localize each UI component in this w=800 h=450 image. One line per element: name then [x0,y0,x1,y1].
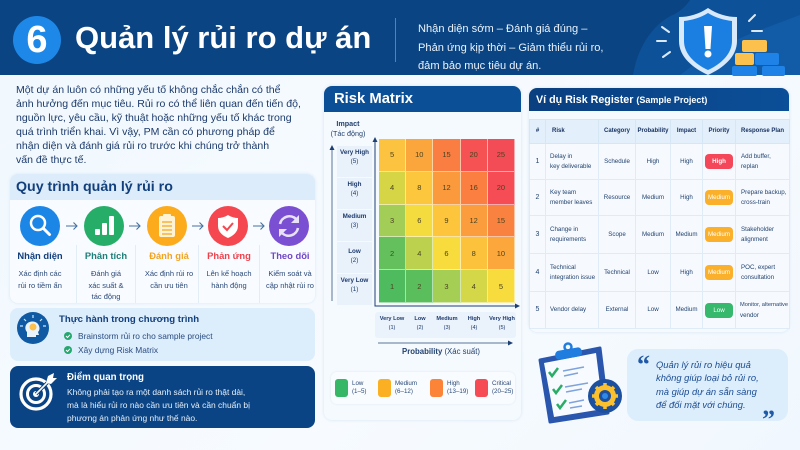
legend: (20–25) [492,388,513,395]
icon: head with light bulb [17,312,49,344]
probability column labels: (5) [499,324,505,330]
icon: monitoring cycle [269,206,309,246]
impact row labels: Medium [343,213,366,220]
impact axis label: Impact [336,119,360,128]
icon: analysis bars [84,206,124,246]
impact arrow [330,145,334,301]
risk register table: Vendor delay [550,306,586,313]
quote mark: close: ” [762,405,775,434]
quote text: không giúp loại bỏ rủi ro, [656,372,759,383]
intro text: vấn đề thực tế. [16,154,86,166]
risk register table: # [536,128,539,134]
risk heat map: 6 [444,249,449,258]
section number badge [13,16,61,64]
risk heat map: 3 [390,216,394,225]
risk register table: High [712,158,726,165]
risk register table: alignment [741,236,768,242]
risk heat map: 8 [472,249,476,258]
icon: shield with blocks [656,8,785,76]
step: analyze: Phân tích [85,250,127,261]
risk register table: High [647,158,659,165]
intro text: Một dự án luôn có những yếu tố không chắc chắn có thể [16,84,280,96]
risk register table: Medium [708,269,730,276]
step: respond: Lên kế hoạch [206,269,252,278]
arrow [253,222,265,230]
impact row labels: (1) [351,286,358,292]
legend: (13–19) [447,388,468,395]
risk register table: Impact [677,128,696,134]
legend: Medium [395,380,417,387]
quote mark: open: “ [637,350,650,379]
risk heat map: 9 [444,216,449,225]
step: monitor: cập nhật rủi ro [266,280,314,290]
practice item 1: Brainstorm rủi ro cho sample project [78,331,213,341]
practice item 2: Xây dựng Risk Matrix [78,345,158,355]
risk register table: 3 [536,231,539,238]
step: respond: Phản ứng [207,250,251,261]
probability column labels: High [468,316,480,322]
risk register table: Technical [550,264,576,271]
step: monitor: Kiểm soát và [268,269,312,278]
risk heat map: 15 [497,216,505,225]
risk register table: Schedule [604,158,630,165]
impact row labels: (4) [351,190,358,196]
step: monitor [266,250,314,290]
tagline: Phản ứng kịp thời – Giảm thiểu rủi ro, [418,42,604,54]
risk register table: Low [713,306,725,314]
risk register table: Response Plan [741,128,784,134]
step: analyze: xác suất & [88,280,124,290]
risk register table: Medium [642,194,664,201]
step: identify: rủi ro tiềm ẩn [18,280,62,290]
key point heading: Điểm quan trọng [67,372,144,383]
tagline [418,23,604,72]
icon: response shield [208,206,248,246]
risk register table: Delay in [550,153,572,160]
risk register table: 2 [536,194,539,201]
tagline: Nhận diện sớm – Đánh giá đúng – [418,23,587,35]
risk register table: Low [647,269,659,276]
risk register table: High [680,158,693,165]
step: identify [17,250,63,290]
practice heading: Thực hành trong chương trình [59,314,199,325]
arrow [192,222,204,230]
risk register table: Medium [708,231,730,238]
key point text: mà là hiểu rủi ro nào cần ưu tiên và cần chuẩn bị [67,400,250,410]
step: analyze: Đánh giá [91,269,121,278]
risk register table: Prepare backup, [741,189,786,196]
risk heat map: 12 [470,216,478,225]
icon: search [20,206,60,246]
process heading: Quy trình quản lý rủi ro [16,179,173,195]
risk register table: Resource [604,194,630,201]
risk register table: 1 [536,158,539,165]
risk heat map: 15 [442,150,451,159]
risk heat map: 6 [417,216,421,225]
panel: risk matrix [324,86,521,420]
risk register table: Change in [550,226,578,233]
section number badge: 6 [26,19,48,61]
risk register table: POC, expert [741,264,775,271]
legend: (6–12) [395,388,413,395]
icon: target [19,373,57,411]
risk register table: Medium [675,306,698,313]
legend: Low [352,380,363,387]
probability column labels [375,312,516,338]
risk heat map: 3 [444,282,449,291]
risk register table: Medium [708,194,730,201]
risk heat map: 20 [470,150,478,159]
impact row labels: (2) [351,257,358,264]
step: evaluate: cần ưu tiên [150,280,188,290]
panel: practice [10,308,315,361]
step: identify: Nhận diện [17,250,63,261]
risk register table [529,119,790,329]
header divider [395,18,396,62]
step: evaluate: Đánh giá [149,250,189,261]
risk register table: Probability [637,128,668,134]
impact row labels: Low [348,248,361,255]
callout: quote [627,349,788,421]
risk register table: 5 [536,306,539,313]
risk register table: key deliverable [550,162,591,170]
risk register table: requirements [550,236,586,242]
risk register table: cross-train [741,198,770,206]
probability arrow [378,340,513,346]
arrow [129,222,141,230]
risk register table: vendor [740,312,759,318]
risk heat map [379,139,515,303]
risk register table: Stakeholder [741,226,774,233]
tagline: đảm bảo mục tiêu dự án. [418,60,541,72]
risk heat map: 16 [470,183,478,192]
risk heat map: 12 [442,183,451,192]
probability column labels: Very Low [380,316,404,322]
step: monitor: Theo dõi [270,250,310,261]
quote text: mà giúp dự án sẵn sàng [656,386,757,397]
risk register table: Technical [604,269,630,276]
risk register table: replan [741,162,758,170]
intro text: nhận diện và đánh giá rủi ro trước khi chúng trở thành [16,140,269,152]
risk register table: Medium [675,231,698,238]
panel: risk register [529,88,789,332]
probability column labels: Medium [436,316,458,322]
risk matrix heading [324,86,521,112]
step: evaluate [145,250,193,290]
risk heat map: 2 [417,282,421,291]
risk heat map: 10 [415,150,423,159]
probability column labels: (1) [389,324,395,330]
legend: Critical [492,380,511,387]
intro text: quá trình triển khai. Vì vậy, PM cần có phương pháp để [16,126,275,138]
matrix axes [372,137,520,308]
step: analyze [85,250,127,301]
icon: clipboard [147,206,187,246]
impact axis label: (Tác động) [331,129,365,138]
title: Quản lý rủi ro dự án [75,20,371,55]
probability column labels: (3) [444,324,450,330]
key point text: phương án phản ứng như thế nào. [67,413,197,423]
quote text: Quản lý rủi ro hiệu quả [656,358,751,370]
quote text: để đối mặt với chúng. [656,399,746,410]
key point text [67,387,250,423]
risk register table: High [680,269,693,276]
process heading [10,174,315,200]
step: respond: hành động [211,280,247,290]
legend [331,372,515,404]
risk heat map: 2 [390,249,394,258]
risk matrix heading: Risk Matrix [334,91,413,107]
risk register table: Key team [550,189,576,196]
risk register table: High [680,194,693,201]
panel: key point [10,366,315,428]
risk register table: Scope [608,231,626,238]
risk heat map: 4 [390,183,394,192]
risk register table: member leaves [550,198,592,206]
intro text: ảnh hưởng đến mục tiêu. Rủi ro có thể liên quan đến tiến độ, [16,98,301,110]
risk heat map: 5 [390,150,394,159]
risk register table: Medium [642,231,664,238]
risk heat map: 8 [417,183,421,192]
risk register table: Category [604,128,630,134]
probability axis label: Probability (Xác suất) [402,347,480,356]
risk heat map: 10 [497,249,505,258]
step: respond [206,250,252,290]
intro text: nguồn lực, yêu cầu, kỹ thuật hoặc những yếu tố khác trong [16,112,292,124]
impact row labels [337,146,372,305]
icon: clipboard with gear [538,342,622,424]
header banner [0,0,800,75]
impact row labels: High [348,180,362,188]
step: analyze: tác động [92,292,120,301]
risk register table: Risk [552,128,565,134]
panel: process [10,174,315,303]
risk register heading: Ví dụ Risk Register (Sample Project) [536,94,707,106]
intro text [16,84,301,166]
risk register table: integration issue [550,274,595,280]
risk register table: Priority [708,128,730,134]
quote text [656,358,759,410]
probability column labels: Very High [489,316,515,322]
impact row labels: Very Low [341,276,368,284]
risk register table: Monitor, alternative [740,302,788,308]
impact row labels: (3) [351,222,358,229]
impact axis label [331,119,365,138]
risk register table: Add buffer, [741,153,771,160]
legend: (1–5) [352,388,366,395]
risk heat map: 25 [497,150,505,159]
risk register table: consultation [741,274,774,280]
impact row labels: (5) [351,158,358,164]
key point text: Không phải tạo ra một danh sách rủi ro thật dài, [67,387,245,397]
risk register heading [529,88,789,111]
risk heat map: 4 [472,282,476,291]
impact row labels: Very High [340,148,369,156]
risk heat map: 1 [390,282,394,291]
step: evaluate: Xác định rủi ro [145,269,193,278]
risk heat map: 4 [417,249,421,258]
risk register table: 4 [536,269,539,276]
risk register table: Low [647,306,659,313]
arrow [66,222,78,230]
risk register table: External [606,306,628,313]
probability column labels: Low [414,316,426,322]
probability column labels: (2) [417,324,423,330]
probability column labels: (4) [471,324,477,330]
risk heat map: 20 [497,183,505,192]
risk heat map: 5 [499,282,503,291]
legend: High [447,380,460,387]
step: identify: Xác định các [19,269,61,278]
